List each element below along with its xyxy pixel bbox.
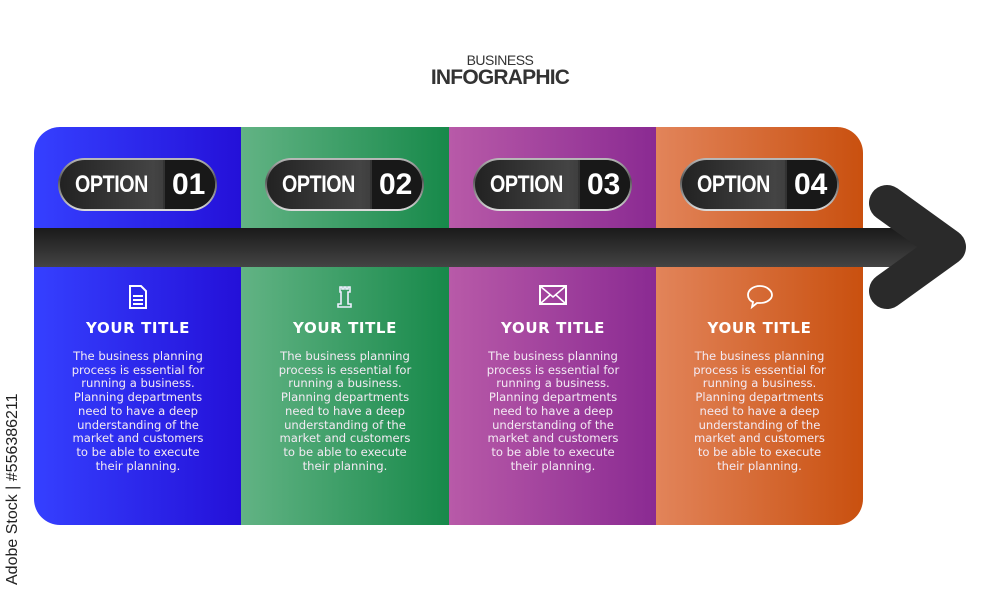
text: need to have a deep	[78, 404, 198, 418]
text: process is essential for	[72, 363, 204, 377]
text: process is essential for	[487, 363, 619, 377]
text	[279, 349, 412, 473]
text: The business planning	[488, 349, 618, 363]
panel: option 03	[449, 127, 657, 525]
icon: document	[129, 285, 147, 309]
pill 03: OPTION	[490, 171, 563, 198]
text: to be able to execute	[698, 445, 821, 459]
text: to be able to execute	[491, 445, 615, 459]
text: market and customers	[280, 431, 410, 445]
text: need to have a deep	[285, 404, 405, 418]
icon: tower	[337, 286, 352, 308]
panel: option 02	[241, 127, 449, 525]
text: Planning departments	[74, 390, 202, 404]
pill 03	[473, 158, 632, 211]
text: their planning.	[511, 459, 595, 473]
text: market and customers	[488, 431, 618, 445]
text: understanding of the	[699, 418, 820, 432]
pill 04: 04	[794, 168, 827, 201]
text: their planning.	[303, 459, 387, 473]
heading: YOUR TITLE	[86, 319, 190, 337]
panel: option 01	[34, 127, 242, 525]
text: their planning.	[96, 459, 180, 473]
watermark side text: Adobe Stock | #556386211	[4, 393, 21, 585]
pill 02: OPTION	[282, 171, 355, 198]
text: understanding of the	[77, 418, 199, 432]
text: market and customers	[694, 431, 825, 445]
title: INFOGRAPHIC	[431, 66, 569, 89]
heading: YOUR TITLE	[293, 319, 397, 337]
text: need to have a deep	[700, 404, 819, 418]
text: understanding of the	[284, 418, 406, 432]
title: BUSINESS	[467, 52, 533, 68]
pill 01: OPTION	[75, 171, 148, 198]
text: running a business.	[81, 376, 195, 390]
text: The business planning	[280, 349, 410, 363]
panel: option 04	[656, 127, 863, 525]
text	[72, 349, 204, 473]
pill 04	[680, 158, 839, 211]
panel container	[34, 127, 863, 525]
heading: YOUR TITLE	[501, 319, 605, 337]
pill 02	[265, 158, 424, 211]
pill 03: 03	[587, 168, 620, 201]
text: market and customers	[73, 431, 203, 445]
text	[487, 349, 620, 473]
text: to be able to execute	[283, 445, 407, 459]
text: process is essential for	[693, 363, 826, 377]
text: The business planning	[73, 349, 203, 363]
heading: YOUR TITLE	[708, 319, 811, 337]
title	[431, 52, 570, 89]
pill 01: 01	[172, 168, 205, 201]
text	[693, 349, 826, 473]
text: need to have a deep	[493, 404, 613, 418]
icon: speech bubble	[747, 285, 773, 310]
icon: envelope	[539, 285, 567, 305]
pill 02: 02	[379, 168, 412, 201]
text: Planning departments	[489, 390, 617, 404]
text: to be able to execute	[76, 445, 200, 459]
text: Planning departments	[281, 390, 409, 404]
text: Planning departments	[695, 390, 824, 404]
text: understanding of the	[492, 418, 614, 432]
text: running a business.	[288, 376, 402, 390]
pill 01	[58, 158, 217, 211]
text: process is essential for	[279, 363, 411, 377]
text: their planning.	[717, 459, 802, 473]
text: running a business.	[496, 376, 610, 390]
text: running a business.	[703, 376, 816, 390]
text: The business planning	[695, 349, 824, 363]
pill 04: OPTION	[697, 171, 770, 198]
